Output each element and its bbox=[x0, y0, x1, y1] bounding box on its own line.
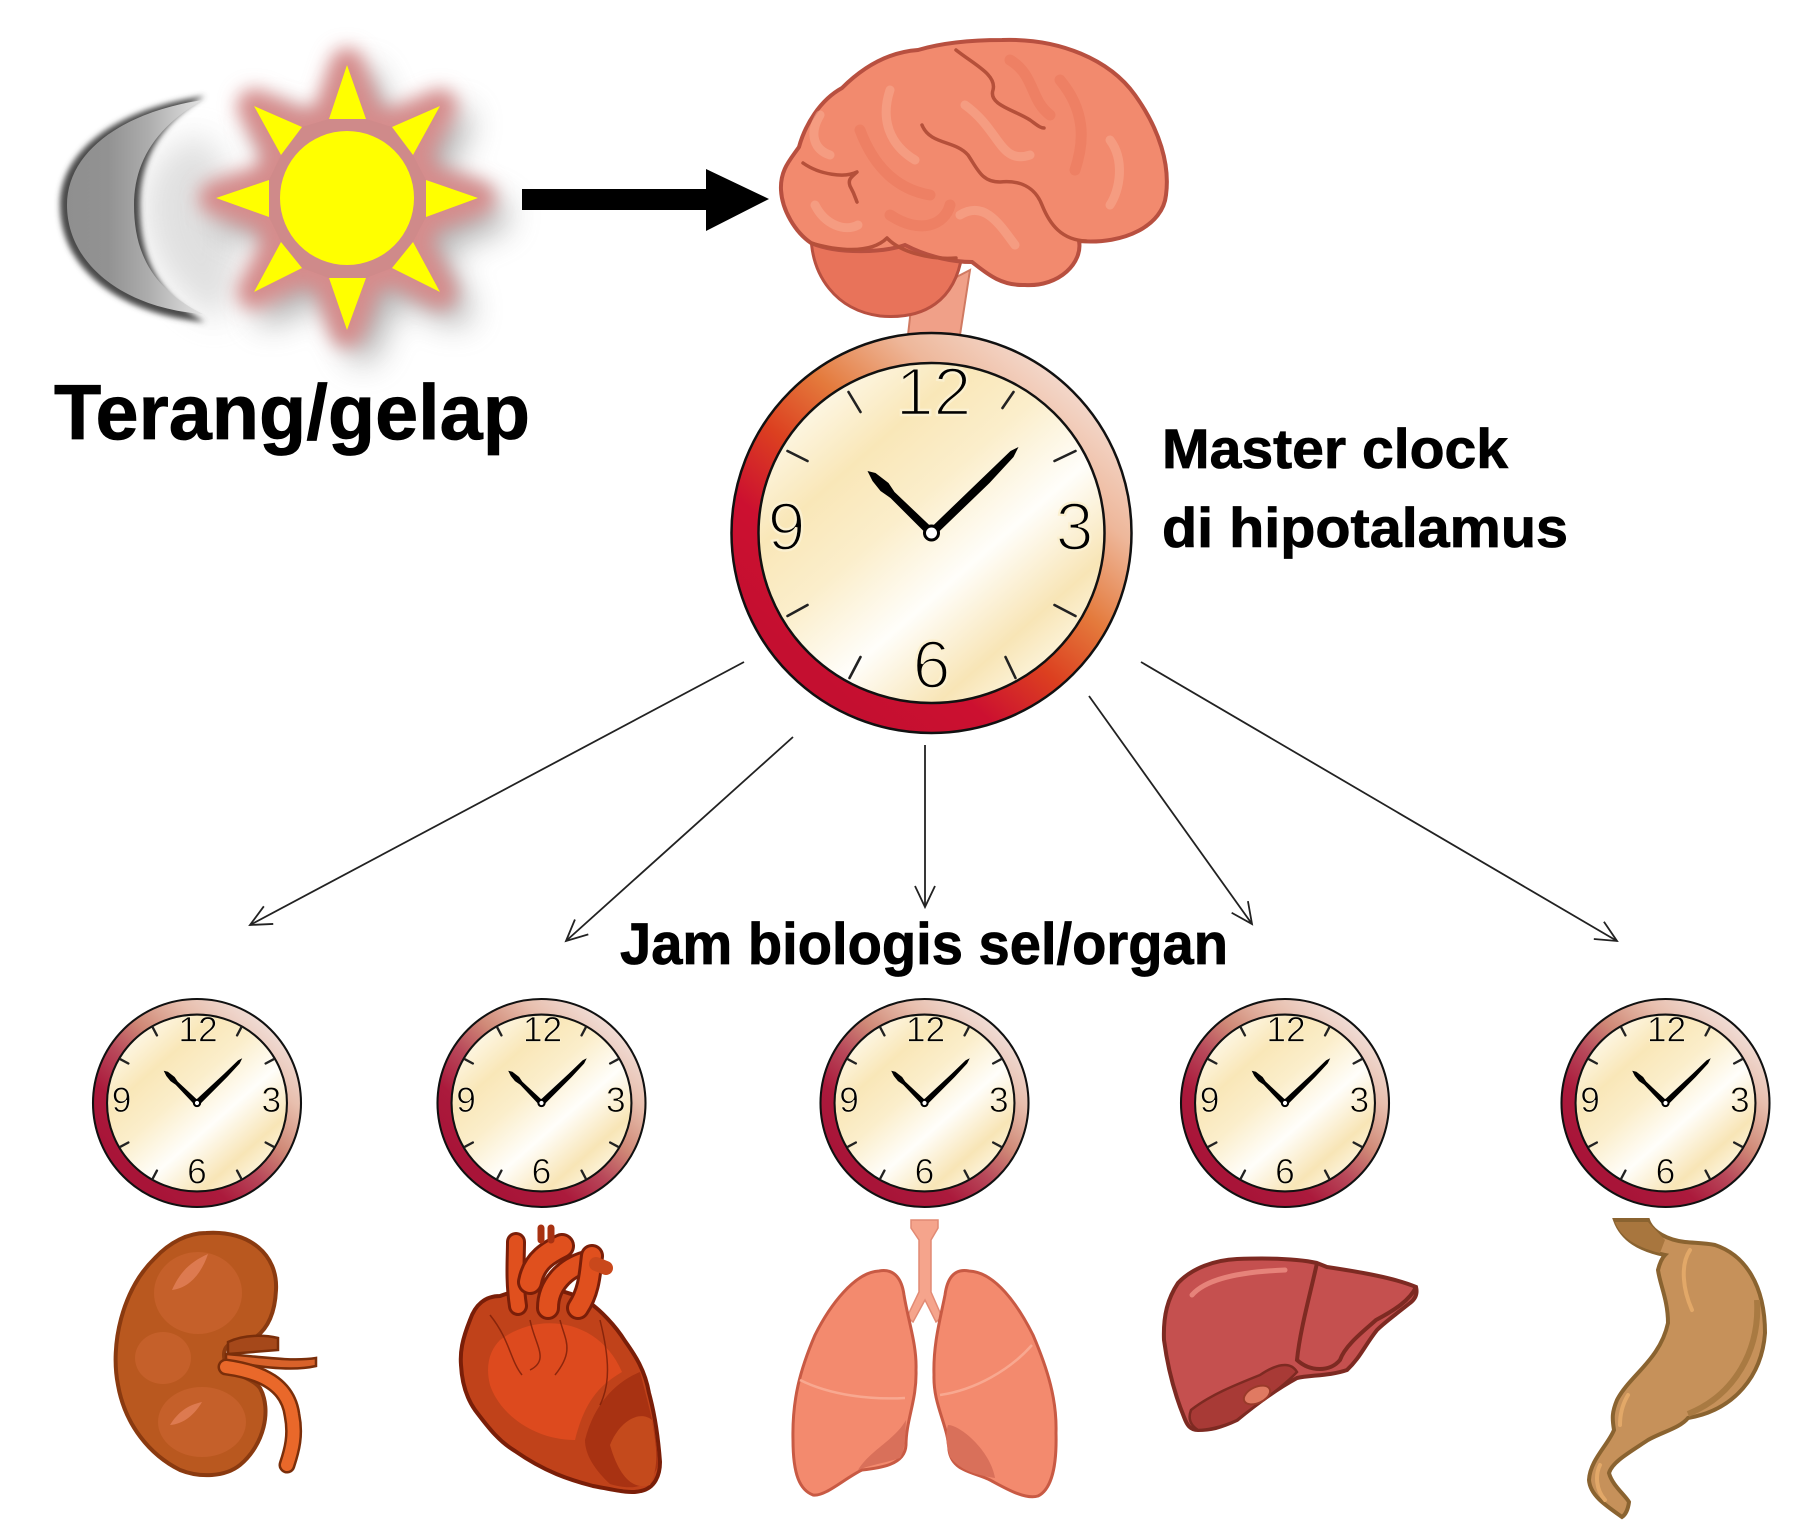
clock: kidney bbox=[93, 999, 301, 1207]
clock numerals: 9 bbox=[768, 489, 805, 565]
clock: stomach: 12 bbox=[1647, 1011, 1686, 1050]
arrow: light to brain bbox=[522, 169, 769, 231]
clock: lungs: 6 bbox=[915, 1153, 934, 1192]
icon: liver bbox=[1164, 1258, 1417, 1430]
clock: liver: 9 bbox=[1200, 1081, 1219, 1120]
clock: stomach bbox=[1562, 999, 1770, 1207]
clock: kidney: 9 bbox=[112, 1081, 131, 1120]
arrows: master clock to organ clocks bbox=[250, 662, 1617, 941]
clock: heart: 12 bbox=[523, 1011, 562, 1050]
icon: kidney bbox=[116, 1233, 316, 1475]
clock: kidney: 6 bbox=[187, 1153, 207, 1192]
clock numerals: 6 bbox=[913, 627, 950, 703]
clock: stomach: 9 bbox=[1580, 1081, 1600, 1120]
label: Master clock di hipotalamus: di hipotalamus bbox=[1162, 496, 1568, 559]
clock: heart: 3 bbox=[606, 1081, 626, 1120]
clock: lungs: 12 bbox=[906, 1011, 945, 1050]
label: Master clock di hipotalamus bbox=[1162, 417, 1568, 559]
clock: heart: 9 bbox=[456, 1081, 476, 1120]
icon: sun bbox=[216, 65, 494, 348]
clock numerals bbox=[768, 354, 1093, 703]
clock: kidney: 3 bbox=[262, 1081, 281, 1120]
clock: lungs bbox=[820, 999, 1028, 1207]
icon: brain bbox=[781, 40, 1167, 335]
clock: heart bbox=[438, 999, 646, 1207]
clock: lungs: 3 bbox=[989, 1081, 1009, 1120]
clock: stomach: 3 bbox=[1730, 1081, 1750, 1120]
icon: moon bbox=[60, 96, 239, 322]
clock numerals: 3 bbox=[1056, 489, 1093, 565]
heading: Terang/gelap: Terang/gelap bbox=[54, 368, 530, 456]
label: Jam biologis sel/organ: Jam biologis sel/organ bbox=[620, 912, 1228, 977]
icon: stomach bbox=[1589, 1220, 1765, 1517]
icon: heart bbox=[461, 1228, 660, 1492]
label: Master clock di hipotalamus: Master clock bbox=[1162, 417, 1509, 480]
clock: stomach: 6 bbox=[1656, 1153, 1675, 1192]
clock numerals: 12 bbox=[896, 354, 971, 430]
clock: master clock bbox=[732, 333, 1132, 733]
clock: liver: 12 bbox=[1266, 1011, 1306, 1050]
clock: heart: 6 bbox=[532, 1153, 551, 1192]
clock: liver bbox=[1181, 999, 1389, 1207]
icon: lungs bbox=[793, 1220, 1056, 1497]
clock: liver: 3 bbox=[1350, 1081, 1369, 1120]
clock: lungs: 9 bbox=[839, 1081, 859, 1120]
clock: liver: 6 bbox=[1275, 1153, 1295, 1192]
clock: kidney: 12 bbox=[178, 1011, 218, 1050]
